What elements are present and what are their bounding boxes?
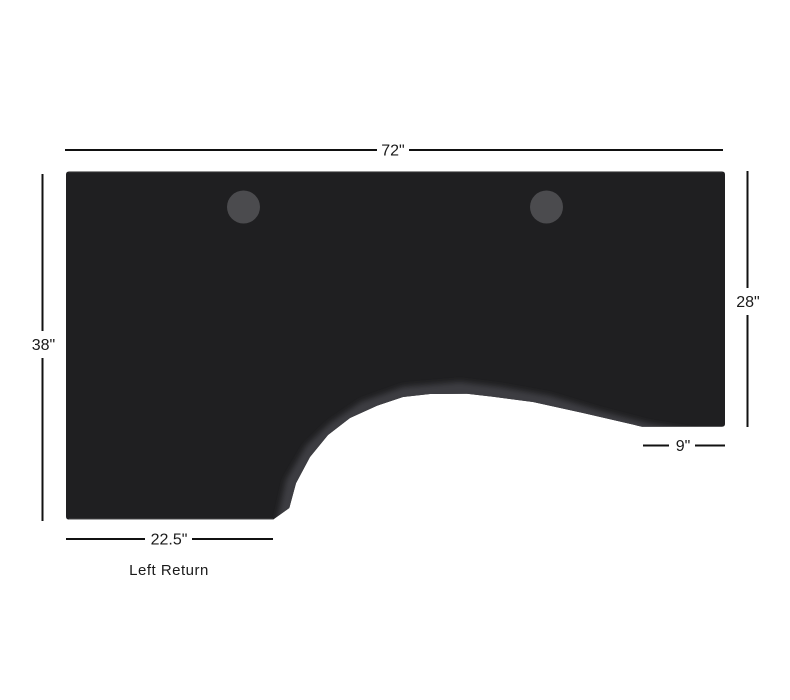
dimension: left return 22.5 inches: 22.5" <box>151 532 187 548</box>
bottom edge highlight <box>69 518 273 520</box>
dimension: overall width 72 inches: 72" <box>381 142 405 160</box>
top edge highlight <box>69 171 722 173</box>
dimension: right depth 28 inches: 28" <box>736 294 760 311</box>
grommet right <box>530 190 563 224</box>
beveled cutout edge <box>276 382 700 525</box>
dimension: overall depth 38 inches: 38" <box>32 337 55 354</box>
dimension: right return 9 inches <box>643 438 725 455</box>
grommet left <box>227 190 260 224</box>
desktop surface <box>66 172 725 525</box>
desk dimension diagram <box>32 144 759 575</box>
dimension: right return 9 inches: 9" <box>676 438 690 455</box>
caption: left return: Left Return <box>129 562 209 579</box>
